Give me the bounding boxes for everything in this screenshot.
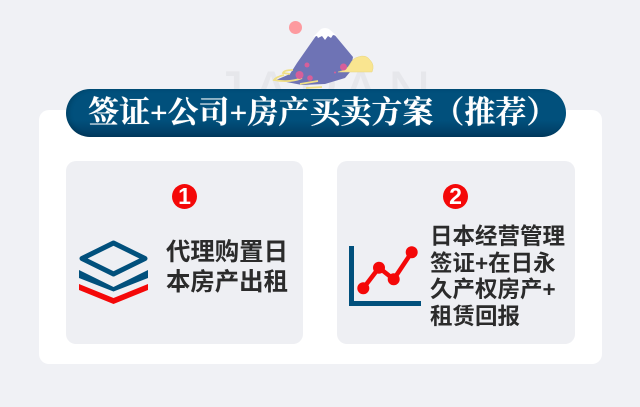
icon: line chart [349,246,421,306]
text: option 2 description: 日本经营管理 [430,224,565,249]
panel: option 1 [66,161,303,344]
icon: yellow cloud [338,56,373,72]
text: option 2 description: 久产权房产+ [430,277,556,302]
text: option 1 description [166,239,288,296]
background word: JAPAN: JAPAN [214,59,438,126]
text: option 2 description: 签证+在日永 [430,250,556,276]
number badge 1 [172,184,197,209]
white card [39,110,602,364]
icon: Mount Fuji illustration [272,21,374,89]
icon: sun [289,21,302,34]
text: option 2 description [430,224,565,328]
text: option 1 description: 代理购置日 [166,239,288,266]
text: option 1 description: 本房产出租 [166,269,288,296]
icon: mist swirls [274,70,322,88]
number badge 2 [443,184,468,209]
icon: layered stack [79,240,148,304]
text: option 2 description: 租赁回报 [430,304,520,328]
icon: snow cap [313,28,337,40]
number badge 1: 1 [178,183,191,209]
number badge 2: 2 [449,183,462,209]
panel: option 2 [337,161,575,344]
icon: blossoms [296,62,347,81]
title banner [66,89,566,137]
icon: mountain [276,30,353,85]
title banner: 签证+公司+房产买卖方案（推荐） [88,95,557,130]
